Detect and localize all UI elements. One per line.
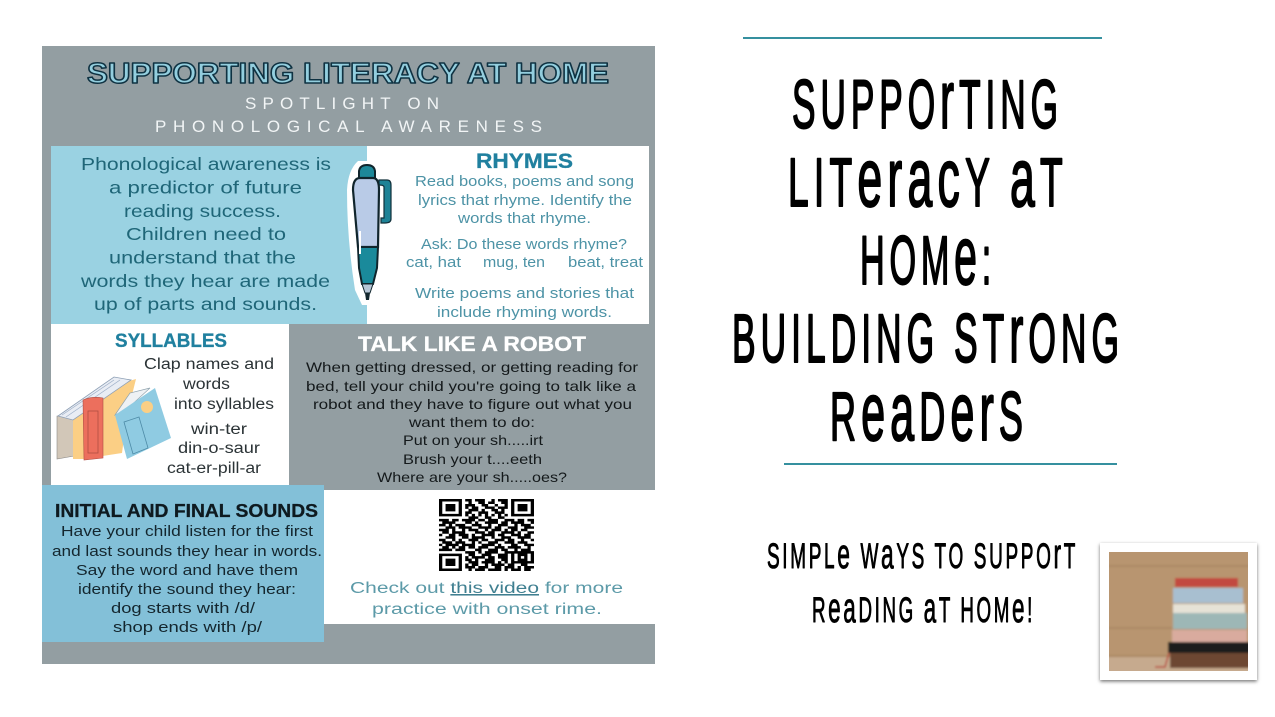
robot heading: TALK LIKE A ROBOT [358, 333, 586, 356]
rhymes text: include rhyming words. [437, 305, 612, 321]
syllables text: cat-er-pill-ar [167, 460, 261, 477]
panel: syllables [51, 324, 289, 485]
slide title: ReaDerS [830, 365, 1028, 458]
panel: phonological awareness intro: Phonological awareness is [81, 154, 331, 174]
panel: QR video link [324, 490, 655, 624]
QR caption: practice with onset rime. [372, 601, 602, 618]
subtitle: SIMPLe WaYS TO SUPPOrT [767, 530, 1078, 577]
poster heading [87, 58, 609, 136]
rhymes text: Write poems and stories that [415, 286, 634, 302]
icon: books [57, 377, 171, 460]
subtitle: ReaDING aT HOMe! [812, 584, 1035, 631]
syllables text: into syllables [174, 396, 274, 413]
initial and final sounds text: and last sounds they hear in words. [52, 544, 322, 560]
QR caption [350, 580, 623, 618]
panel: infographic poster [42, 46, 655, 664]
panel: phonological awareness intro: understand that the [109, 248, 296, 268]
robot text [306, 359, 638, 485]
syllables heading: SYLLABLES [115, 330, 227, 352]
syllables text [144, 356, 274, 477]
slide title: SUPPOrTING [792, 53, 1063, 146]
QR caption: Check out this video for more [350, 580, 623, 597]
initial and final sounds text: dog starts with /d/ [111, 601, 256, 617]
panel: phonological awareness intro: a predictor of future [109, 178, 302, 198]
initial and final sounds text: identify the sound they hear: [78, 582, 296, 598]
panel: initial and final sounds [42, 485, 324, 642]
syllables text: din-o-saur [178, 440, 260, 457]
syllables text: words [182, 376, 230, 393]
panel: phonological awareness intro [51, 146, 367, 324]
slide title: LITeracY aT [788, 131, 1068, 224]
poster heading: SPOTLIGHT ON [245, 94, 439, 113]
rhymes heading: RHYMES [476, 149, 573, 173]
slide title: HOMe: [860, 209, 996, 302]
rhymes text: cat, hat [406, 255, 461, 271]
top rule [743, 37, 1102, 39]
robot text: Put on your sh.....irt [403, 432, 543, 448]
initial and final sounds text: Have your child listen for the first [61, 524, 313, 540]
initial and final sounds heading: INITIAL AND FINAL SOUNDS [55, 500, 318, 521]
robot text: robot and they have to figure out what you [313, 396, 632, 412]
rhymes text: Ask: Do these words rhyme? [421, 237, 627, 253]
slide title: BUILDING STrONG [732, 287, 1124, 380]
subtitle [767, 530, 1078, 631]
QR code [439, 499, 534, 571]
robot text: Where are your sh.....oes? [377, 469, 567, 485]
robot text: bed, tell your child you're going to talk like a [306, 378, 636, 394]
bottom rule [784, 463, 1117, 465]
panel: phonological awareness intro: words they hear are made [80, 271, 330, 291]
poster heading: SUPPORTING LITERACY AT HOME [87, 58, 609, 90]
rhymes text: words that rhyme. [457, 211, 591, 227]
initial and final sounds text: Say the word and have them [76, 563, 298, 579]
initial and final sounds text [52, 524, 322, 636]
syllables text: win-ter [190, 421, 247, 438]
robot text: want them to do: [408, 414, 535, 430]
robot text: When getting dressed, or getting reading for [306, 359, 638, 375]
rhymes text: lyrics that rhyme. Identify the [418, 193, 632, 209]
panel: phonological awareness intro: Children need to [126, 224, 286, 244]
panel: rhymes [367, 146, 649, 324]
slide title [732, 53, 1124, 458]
syllables text: Clap names and [144, 356, 274, 373]
panel: phonological awareness intro: reading success. [124, 201, 281, 221]
icon: pen [347, 161, 395, 305]
rhymes text [406, 174, 643, 321]
robot text: Brush your t....eeth [403, 451, 542, 467]
initial and final sounds text: shop ends with /p/ [113, 620, 263, 636]
panel: phonological awareness intro: up of parts and sounds. [94, 294, 317, 314]
poster heading: PHONOLOGICAL AWARENESS [155, 117, 542, 136]
rhymes text: Read books, poems and song [415, 174, 634, 190]
photo: stack of books on wood [1100, 543, 1257, 680]
panel: talk like a robot [306, 333, 638, 485]
rhymes text: mug, ten [483, 255, 545, 271]
rhymes text: beat, treat [568, 255, 643, 271]
